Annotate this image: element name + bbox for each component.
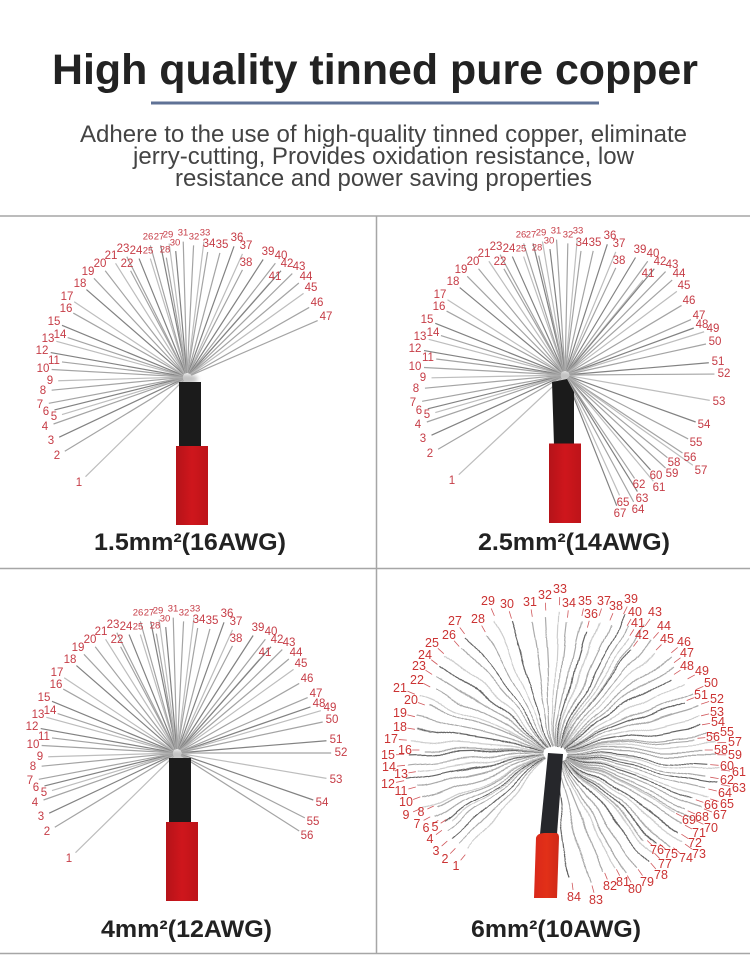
strand number labels 2.5mm2: 4: [415, 419, 422, 431]
strand number labels 4mm2: 9: [37, 751, 43, 763]
strand number labels 2.5mm2: 5: [424, 409, 430, 421]
strand number labels 6mm2: 19: [393, 706, 407, 720]
strand number labels 6mm2: 26: [442, 628, 456, 642]
strand number labels 6mm2: 7: [414, 817, 421, 831]
strand number labels 6mm2: 80: [628, 882, 642, 896]
strand number labels 2.5mm2: 37: [613, 238, 625, 250]
strand number labels 2.5mm2: 16: [433, 301, 445, 313]
strand number labels 6mm2: 82: [603, 879, 617, 893]
strand number labels 4mm2: 18: [64, 654, 76, 666]
strand number labels 6mm2: 74: [679, 851, 693, 865]
strand number labels 2.5mm2: 35: [589, 237, 601, 249]
strand number labels 2.5mm2: 17: [434, 289, 446, 301]
strand number labels 4mm2: 35: [206, 615, 218, 627]
strand number labels 6mm2: 62: [720, 773, 734, 787]
strand number labels 4mm2: 43: [283, 637, 295, 649]
strand number labels 6mm2: 20: [404, 693, 418, 707]
strand number labels 1.5mm2: 25: [143, 246, 153, 256]
strand number labels 2.5mm2: 54: [698, 419, 711, 431]
strand number labels 2.5mm2: 7: [410, 397, 416, 409]
strand number labels 6mm2: 50: [704, 676, 718, 690]
strand number labels 1.5mm2: 15: [48, 316, 60, 328]
strand number labels 2.5mm2: 51: [712, 356, 724, 368]
strand number labels 4mm2: 11: [38, 731, 50, 743]
strand number labels 2.5mm2: 1: [449, 475, 455, 487]
strand number labels 6mm2: 36: [584, 607, 598, 621]
strand number labels 4mm2: 30: [160, 614, 170, 624]
strand number labels 6mm2: 67: [713, 808, 727, 822]
strand number labels 4mm2: 39: [252, 622, 264, 634]
strand number labels 6mm2: 29: [481, 594, 495, 608]
strand number labels 6mm2: 64: [718, 786, 732, 800]
strand number labels 6mm2: 84: [567, 890, 581, 904]
strand number labels 6mm2: 49: [695, 664, 709, 678]
strand number labels 6mm2: 43: [648, 605, 662, 619]
strand number labels 6mm2: 14: [382, 760, 396, 774]
strand number labels 6mm2: 46: [677, 635, 691, 649]
strand number labels 1.5mm2: 3: [48, 435, 54, 447]
strand number labels 6mm2: 18: [393, 720, 407, 734]
strand number labels 6mm2: 24: [418, 648, 432, 662]
strand number labels 2.5mm2: 12: [409, 343, 421, 355]
strand number labels 1.5mm2: 35: [216, 239, 228, 251]
strand number labels 2.5mm2: 57: [695, 465, 707, 477]
strand number labels 6mm2: 63: [732, 781, 746, 795]
wire strands 4mm2: [30, 609, 341, 859]
strand number labels 2.5mm2: 60: [650, 470, 662, 482]
strand number labels 2.5mm2: 61: [653, 482, 665, 494]
strand number labels 4mm2: 33: [190, 604, 200, 614]
strand number labels 2.5mm2: 32: [563, 230, 573, 240]
strand number labels 2.5mm2: 47: [693, 310, 705, 322]
strand number labels 6mm2: 6: [423, 821, 430, 835]
strand number labels 4mm2: 42: [271, 634, 283, 646]
strand number labels 6mm2: 78: [654, 868, 668, 882]
strand number labels 1.5mm2: 22: [121, 258, 133, 270]
strand number labels 6mm2: 55: [720, 725, 734, 739]
strand number labels 1.5mm2: 10: [37, 363, 49, 375]
strand number labels 4mm2: 47: [310, 688, 322, 700]
strand number labels 6mm2: 65: [720, 797, 734, 811]
description text: jerry-cutting, Provides oxidation resistance, low: [132, 143, 635, 170]
strand number labels 1.5mm2: 17: [61, 291, 73, 303]
description text: resistance and power saving properties: [175, 165, 592, 192]
strand number labels 4mm2: 1: [66, 853, 72, 865]
strand number labels 1.5mm2: 47: [320, 311, 332, 323]
panel: 1.5mm2 16AWG: [36, 228, 332, 556]
strand number labels 2.5mm2: 34: [576, 237, 589, 249]
strand number labels 6mm2: 66: [704, 798, 718, 812]
strand number labels 4mm2: 55: [307, 816, 319, 828]
strand number labels 6mm2: 79: [640, 875, 654, 889]
strand number labels 6mm2: 47: [680, 646, 694, 660]
strand number labels 2.5mm2: 52: [718, 368, 730, 380]
strand number labels 6mm2: 76: [650, 843, 664, 857]
strand number labels 6mm2: 54: [711, 715, 725, 729]
strand number labels 2.5mm2: 28: [532, 242, 542, 254]
strand number labels 1.5mm2: 42: [281, 258, 293, 270]
strand number labels 1.5mm2: 12: [36, 345, 48, 357]
strand number labels 4mm2: 12: [26, 721, 38, 733]
strand number labels 6mm2: 3: [433, 844, 440, 858]
strand number labels 1.5mm2: [36, 228, 332, 489]
strand number labels 2.5mm2: 63: [636, 493, 648, 505]
strand number labels 4mm2: 4: [32, 797, 39, 809]
strand number labels 1.5mm2: 6: [43, 406, 49, 418]
strand number labels 6mm2: 58: [714, 743, 728, 757]
strand number labels 2.5mm2: 64: [632, 504, 645, 516]
strand number labels 6mm2: 4: [427, 832, 434, 846]
strand number labels 2.5mm2: 45: [678, 280, 690, 292]
strand number labels 2.5mm2: 20: [467, 256, 479, 268]
strand number labels 6mm2: 2: [442, 852, 449, 866]
strand number labels 1.5mm2: 32: [189, 232, 199, 242]
strand number labels 2.5mm2: 11: [422, 352, 434, 364]
strand number labels 6mm2: 81: [616, 875, 630, 889]
cable red outer sheath: [534, 833, 559, 898]
strand number labels 4mm2: [26, 604, 347, 865]
strand number labels 4mm2: 20: [84, 634, 96, 646]
strand number labels 6mm2: 68: [695, 810, 709, 824]
strand number labels 6mm2: 37: [597, 594, 611, 608]
strand number labels 1.5mm2: 8: [40, 385, 46, 397]
strand number labels 6mm2: 51: [694, 688, 708, 702]
strand number labels 2.5mm2: 25: [516, 244, 526, 254]
strand number labels 1.5mm2: 36: [231, 232, 243, 244]
strand number labels 1.5mm2: 23: [117, 243, 129, 255]
strand number labels 2.5mm2: 14: [427, 327, 440, 339]
strand number labels 2.5mm2: 67: [614, 508, 626, 520]
strand number labels 2.5mm2: 42: [654, 256, 666, 268]
strand number labels 2.5mm2: 48: [696, 319, 708, 331]
cable red outer sheath: [176, 446, 208, 525]
strand number labels 4mm2: 17: [51, 667, 63, 679]
title underline: [151, 102, 599, 104]
strand number labels 4mm2: 15: [38, 692, 50, 704]
strand number labels 4mm2: 29: [153, 606, 163, 616]
strand number labels 1.5mm2: 41: [269, 271, 281, 283]
strand number labels 1.5mm2: 29: [163, 230, 173, 240]
strand number labels 6mm2: 10: [399, 795, 413, 809]
strand number labels 2.5mm2: 2: [427, 448, 433, 460]
strand number labels 6mm2: 31: [523, 595, 537, 609]
strand number labels 4mm2: 21: [95, 626, 107, 638]
strand number labels 1.5mm2: 37: [240, 240, 252, 252]
strand number labels 2.5mm2: 38: [613, 255, 625, 267]
strand number labels 6mm2: 33: [553, 582, 567, 596]
panel: 2.5mm2 14AWG: [409, 226, 730, 556]
strand number labels 1.5mm2: 33: [200, 228, 210, 238]
strand number labels 6mm2: 1: [453, 859, 460, 873]
strand number labels 4mm2: 24: [120, 621, 133, 633]
strand number labels 2.5mm2: 53: [713, 396, 725, 408]
strand number labels 1.5mm2: 39: [262, 246, 274, 258]
wire strands 1.5mm2: [40, 233, 326, 483]
caption 1.5mm2: 1.5mm²(16AWG): [94, 529, 286, 556]
strand number labels 6mm2: 71: [692, 826, 706, 840]
strand number labels 4mm2: 8: [30, 761, 36, 773]
strand number labels 2.5mm2: 46: [683, 295, 695, 307]
strand number labels 2.5mm2: 43: [666, 259, 678, 271]
strand number labels 6mm2: 48: [680, 659, 694, 673]
strand number labels 4mm2: 25: [133, 622, 143, 632]
strand number labels 4mm2: 27: [144, 608, 154, 618]
strand number labels 4mm2: 32: [179, 608, 189, 618]
strand number labels 4mm2: 28: [150, 620, 160, 632]
strand number labels 2.5mm2: 13: [414, 331, 426, 343]
strand number labels 6mm2: 12: [381, 777, 395, 791]
strand number labels 4mm2: 5: [41, 787, 47, 799]
strand number labels 6mm2: 41: [631, 616, 645, 630]
strand number labels 6mm2: 11: [395, 784, 408, 798]
strand number labels 2.5mm2: 3: [420, 433, 426, 445]
strand number labels 2.5mm2: 55: [690, 437, 702, 449]
strand number labels 2.5mm2: 33: [573, 226, 583, 236]
strand number labels 6mm2: 42: [635, 628, 649, 642]
strand number labels 4mm2: 40: [265, 626, 277, 638]
strand number labels 4mm2: 49: [324, 702, 336, 714]
strand number labels 6mm2: 61: [732, 765, 746, 779]
strand number labels 6mm2: 15: [381, 748, 395, 762]
strand number labels 6mm2: 83: [589, 893, 603, 907]
strand number labels 1.5mm2: 26: [143, 232, 153, 242]
strand number labels 4mm2: 50: [326, 714, 338, 726]
strand number labels 4mm2: 23: [107, 619, 119, 631]
strand number labels 1.5mm2: 45: [305, 282, 317, 294]
strand number labels 4mm2: 38: [230, 633, 242, 645]
description text: [80, 121, 687, 192]
strand number labels 6mm2: 35: [578, 594, 592, 608]
strand number labels 4mm2: 16: [50, 679, 62, 691]
strand number labels 2.5mm2: 15: [421, 314, 433, 326]
strand number labels 6mm2: 44: [657, 619, 671, 633]
strand number labels 1.5mm2: 5: [51, 411, 57, 423]
strand number labels 4mm2: 54: [316, 797, 329, 809]
strand number labels 6mm2: 30: [500, 597, 514, 611]
strand number labels 1.5mm2: 13: [42, 333, 54, 345]
strand number labels 2.5mm2: 56: [684, 452, 696, 464]
strand number labels 2.5mm2: 27: [526, 230, 536, 240]
strand number labels 6mm2: 16: [398, 743, 412, 757]
strand number labels 6mm2: 72: [688, 836, 702, 850]
strand number labels 4mm2: 26: [133, 608, 143, 618]
caption 6mm2: 6mm²(10AWG): [471, 916, 641, 943]
strand number labels 4mm2: 53: [330, 774, 342, 786]
strand number labels 2.5mm2: 40: [647, 248, 659, 260]
strand number labels 4mm2: 19: [72, 642, 84, 654]
strand number labels 6mm2: [381, 582, 746, 907]
strand number labels 4mm2: 3: [38, 811, 44, 823]
cable black inner insulation: [179, 382, 201, 448]
strand number labels 2.5mm2: 8: [413, 383, 419, 395]
strand number labels 4mm2: 56: [301, 830, 313, 842]
strand number labels 2.5mm2: 9: [420, 372, 426, 384]
strand number labels 1.5mm2: 9: [47, 375, 53, 387]
strand number labels 6mm2: 9: [403, 808, 410, 822]
strand number labels 6mm2: 77: [658, 857, 672, 871]
strand number labels 6mm2: 52: [710, 692, 724, 706]
strand number labels 6mm2: 53: [710, 705, 724, 719]
strand number labels 4mm2: 48: [313, 698, 325, 710]
strand number labels 6mm2: 34: [562, 596, 576, 610]
strand number labels 1.5mm2: 46: [311, 297, 323, 309]
strand number labels 6mm2: 8: [418, 805, 425, 819]
panel: 4mm2 12AWG: [26, 604, 347, 943]
title: High quality tinned pure copper: [52, 46, 698, 94]
strand number labels 1.5mm2: 7: [37, 399, 43, 411]
strand number labels 2.5mm2: 49: [707, 323, 719, 335]
strand number labels 1.5mm2: 38: [240, 257, 252, 269]
strand number labels 2.5mm2: 39: [634, 244, 646, 256]
strand number labels 6mm2: 21: [393, 681, 407, 695]
strand number labels 2.5mm2: 10: [409, 361, 421, 373]
strand number labels 2.5mm2: 65: [617, 497, 629, 509]
strand number labels 6mm2: 17: [384, 732, 398, 746]
strand number labels 2.5mm2: 21: [478, 248, 490, 260]
strand number labels 1.5mm2: 44: [300, 271, 313, 283]
strand number labels 4mm2: 46: [301, 673, 313, 685]
strand number labels 6mm2: 59: [728, 748, 742, 762]
strand number labels 1.5mm2: 34: [203, 238, 216, 250]
strand number labels 4mm2: 36: [221, 608, 233, 620]
strand number labels 6mm2: 45: [660, 632, 674, 646]
strand number labels 1.5mm2: 14: [54, 329, 67, 341]
strand number labels 2.5mm2: 44: [673, 268, 686, 280]
strand number labels 4mm2: 22: [111, 634, 123, 646]
strand number labels 4mm2: 13: [32, 709, 44, 721]
strand number labels 2.5mm2: 41: [642, 268, 654, 280]
strand number labels 2.5mm2: 23: [490, 241, 502, 253]
strand number labels 4mm2: 7: [27, 775, 33, 787]
cable black inner insulation: [540, 753, 563, 834]
strand number labels 2.5mm2: 58: [668, 457, 680, 469]
wire strands 2.5mm2: [413, 231, 724, 514]
strand number labels 6mm2: 73: [692, 847, 706, 861]
strand number labels 2.5mm2: 36: [604, 230, 616, 242]
strand number labels 4mm2: 2: [44, 826, 50, 838]
strand number labels 4mm2: 10: [27, 739, 39, 751]
strand number labels 2.5mm2: [409, 226, 730, 520]
cable black inner insulation: [552, 379, 574, 445]
strand number labels 2.5mm2: 59: [666, 468, 678, 480]
strand number labels 2.5mm2: 26: [516, 230, 526, 240]
cable black inner insulation: [169, 758, 191, 824]
strand number labels 1.5mm2: 30: [170, 238, 180, 248]
strand number labels 1.5mm2: 24: [130, 245, 143, 257]
strand number labels 1.5mm2: 21: [105, 250, 117, 262]
strand number labels 1.5mm2: 19: [82, 266, 94, 278]
strand number labels 6mm2: 39: [624, 592, 638, 606]
strand number labels 6mm2: 38: [609, 599, 623, 613]
strand number labels 6mm2: 40: [628, 605, 642, 619]
caption 4mm2: 4mm²(12AWG): [101, 916, 272, 943]
strand number labels 2.5mm2: 30: [544, 236, 554, 246]
strand number labels 1.5mm2: 11: [48, 355, 60, 367]
strand number labels 6mm2: 69: [682, 813, 696, 827]
strand number labels 6mm2: 13: [394, 767, 408, 781]
strand number labels 6mm2: 57: [728, 735, 742, 749]
strand number labels 6mm2: 56: [706, 730, 720, 744]
strand number labels 2.5mm2: 50: [709, 336, 721, 348]
caption 2.5mm2: 2.5mm²(14AWG): [478, 529, 670, 556]
strand number labels 2.5mm2: 19: [455, 264, 467, 276]
strand number labels 6mm2: 60: [720, 759, 734, 773]
strand number labels 1.5mm2: 40: [275, 250, 287, 262]
strand number labels 6mm2: 22: [410, 673, 424, 687]
strand number labels 6mm2: 25: [425, 636, 439, 650]
strand number labels 1.5mm2: 28: [160, 244, 170, 256]
panel: 6mm2 10AWG: [381, 582, 746, 943]
strand number labels 1.5mm2: 1: [76, 477, 82, 489]
strand number labels 4mm2: 37: [230, 616, 242, 628]
strand number labels 4mm2: 51: [330, 734, 342, 746]
strand number labels 6mm2: 75: [664, 847, 678, 861]
strand number labels 2.5mm2: 18: [447, 276, 459, 288]
strand number labels 6mm2: 23: [412, 659, 426, 673]
strand number labels 1.5mm2: 27: [154, 232, 164, 242]
strand number labels 2.5mm2: 62: [633, 479, 645, 491]
wire strands 6mm2: [388, 589, 739, 900]
strand number labels 1.5mm2: 2: [54, 450, 60, 462]
strand number labels 2.5mm2: 6: [416, 405, 422, 417]
strand number labels 1.5mm2: 43: [293, 261, 305, 273]
strand number labels 1.5mm2: 4: [42, 421, 49, 433]
strand number labels 2.5mm2: 22: [494, 256, 506, 268]
description text: Adhere to the use of high-quality tinned copper, eliminate: [80, 121, 687, 148]
strand number labels 6mm2: 28: [471, 612, 485, 626]
strand number labels 4mm2: 14: [44, 705, 57, 717]
strand number labels 4mm2: 31: [168, 604, 178, 614]
strand number labels 2.5mm2: 29: [536, 228, 546, 238]
strand number labels 4mm2: 44: [290, 647, 303, 659]
strand number labels 6mm2: 27: [448, 614, 462, 628]
strand number labels 1.5mm2: 16: [60, 303, 72, 315]
strand number labels 1.5mm2: 18: [74, 278, 86, 290]
strand number labels 2.5mm2: 31: [551, 226, 561, 236]
strand number labels 4mm2: 52: [335, 747, 347, 759]
strand number labels 6mm2: 32: [538, 588, 552, 602]
cable red outer sheath: [166, 822, 198, 901]
strand number labels 6mm2: 70: [704, 821, 718, 835]
strand number labels 4mm2: 41: [259, 647, 271, 659]
strand number labels 1.5mm2: 20: [94, 258, 106, 270]
strand number labels 4mm2: 34: [193, 614, 206, 626]
strand number labels 1.5mm2: 31: [178, 228, 188, 238]
strand number labels 4mm2: 6: [33, 782, 39, 794]
strand number labels 4mm2: 45: [295, 658, 307, 670]
cable red outer sheath: [549, 444, 581, 523]
strand number labels 2.5mm2: 24: [503, 243, 516, 255]
strand number labels 6mm2: 5: [432, 820, 439, 834]
